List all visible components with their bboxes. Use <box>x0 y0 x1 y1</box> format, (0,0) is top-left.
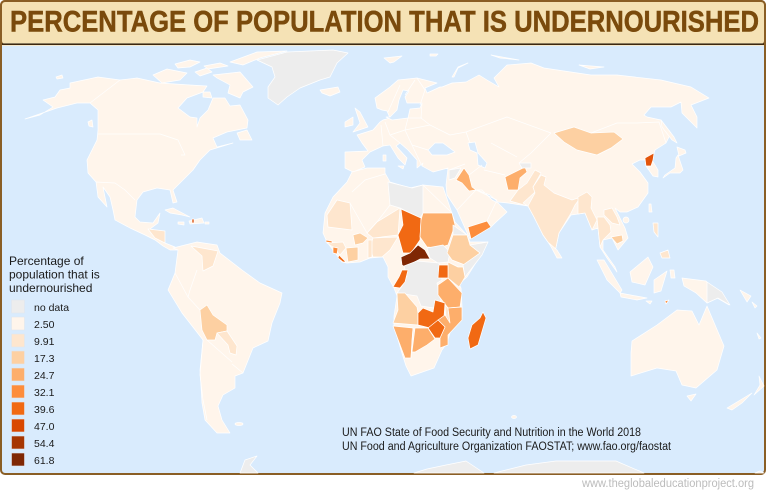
cambodia <box>611 235 623 244</box>
tanzania <box>438 278 462 308</box>
india <box>528 175 581 252</box>
philippines shading <box>653 223 670 258</box>
legend labels: 24.7 <box>34 370 55 382</box>
country borders <box>90 78 666 420</box>
afghanistan <box>505 167 527 190</box>
south america <box>168 242 282 433</box>
legend heading: population that is <box>9 268 100 282</box>
gambia <box>326 240 332 243</box>
japan and east asian islands <box>549 120 686 258</box>
mozambique <box>438 307 462 348</box>
haiti <box>192 219 194 223</box>
kenya <box>448 262 465 287</box>
legend heading: Percentage of <box>9 254 84 268</box>
yemen <box>468 221 491 239</box>
uganda <box>438 265 448 278</box>
venezuela <box>191 246 218 271</box>
namibia <box>393 326 413 358</box>
madagascar <box>468 312 486 349</box>
bolivia <box>200 305 227 340</box>
legend labels: 32.1 <box>34 387 55 399</box>
legend labels: 2.50 <box>34 319 55 331</box>
legend swatches <box>12 300 24 466</box>
central african republic <box>401 245 430 267</box>
angola <box>393 293 418 325</box>
south sudan <box>427 245 450 263</box>
footer url: www.theglobaleducationproject.org <box>581 478 754 490</box>
paraguay <box>217 331 237 355</box>
congo <box>393 270 408 288</box>
central america shading <box>148 229 165 243</box>
arctic islands <box>56 51 287 225</box>
north america <box>25 77 248 250</box>
source text: UN Food and Agriculture Organization FAOSTAT; www.fao.org/faostat <box>342 441 672 453</box>
legend labels: 17.3 <box>34 353 55 365</box>
pakistan <box>510 170 541 206</box>
inland seas <box>386 90 487 168</box>
legend labels: 61.8 <box>34 455 55 467</box>
australia and new zealand <box>631 306 764 410</box>
legend labels: 39.6 <box>34 404 55 416</box>
mongolia <box>554 127 623 155</box>
legend labels: 47.0 <box>34 421 55 433</box>
malawi <box>445 305 450 323</box>
iraq <box>456 168 476 191</box>
chad <box>398 209 421 253</box>
liberia <box>338 255 346 262</box>
ethiopia <box>447 235 480 265</box>
libya <box>388 182 423 218</box>
legend labels: 9.91 <box>34 336 55 348</box>
north korea <box>645 153 654 166</box>
botswana <box>412 328 435 352</box>
legend labels: 54.4 <box>34 438 55 450</box>
iceland, uk and arctic russia <box>320 54 604 169</box>
eritrea <box>453 225 467 235</box>
west africa shading <box>327 200 352 230</box>
dr congo <box>397 261 442 308</box>
source text <box>342 427 672 453</box>
falkland and kerguelen <box>235 416 516 426</box>
panel: title banner <box>1 1 765 46</box>
legend heading: undernourished <box>9 281 92 295</box>
southeast asia shading <box>578 192 597 230</box>
somalia <box>463 242 488 277</box>
greenland <box>257 50 348 105</box>
syria <box>449 168 461 180</box>
source text: UN FAO State of Food Security and Nutrition in the World 2018 <box>342 427 641 439</box>
antarctica <box>240 456 764 473</box>
sierra leone <box>333 247 338 254</box>
legend labels: no data <box>34 302 69 314</box>
legend <box>9 254 100 467</box>
legend labels <box>34 302 69 467</box>
eurasia <box>345 63 709 272</box>
sudan <box>420 213 455 248</box>
tajikistan no data patch <box>519 163 531 168</box>
indonesia and new guinea <box>597 257 761 339</box>
africa <box>323 168 488 376</box>
zambia <box>418 300 445 328</box>
zimbabwe <box>428 320 445 338</box>
